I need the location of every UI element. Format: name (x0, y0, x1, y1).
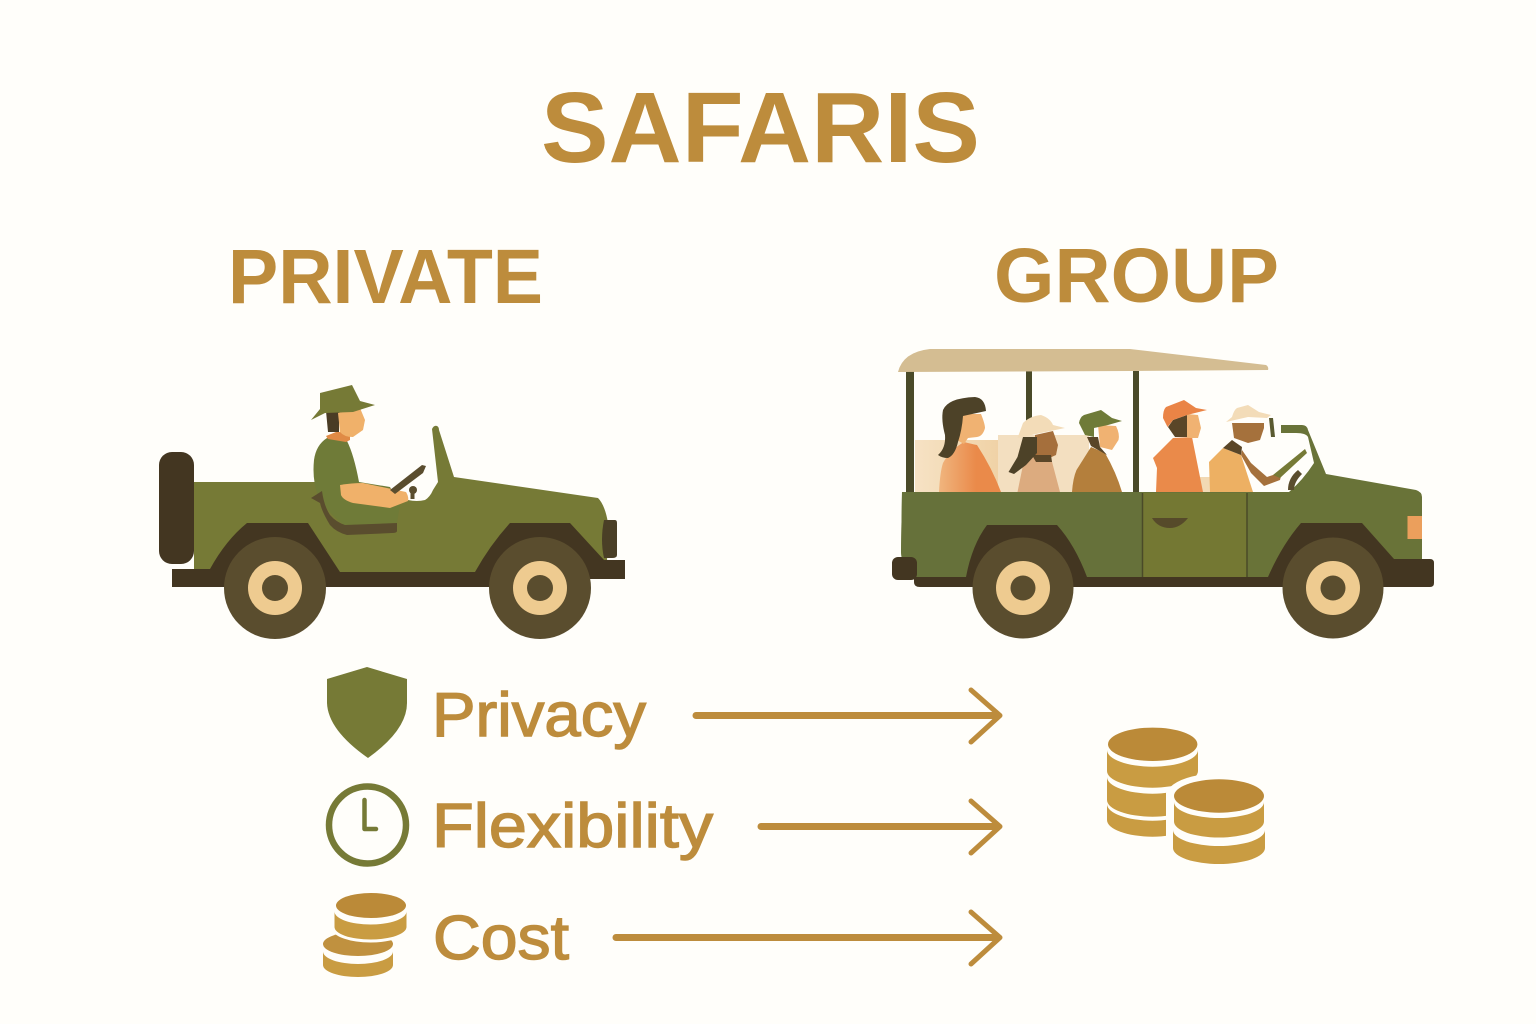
icon: shield (327, 667, 407, 758)
label: cost: Cost (433, 904, 569, 973)
seats (915, 435, 1212, 492)
illustration: group safari vehicle (892, 349, 1434, 638)
icon: large coin stacks (1107, 728, 1280, 870)
driver seat (311, 491, 397, 535)
spare tire (159, 452, 194, 564)
steering wheel (390, 465, 426, 499)
icon: clock (329, 786, 406, 864)
door handle (1152, 518, 1188, 528)
bumper and fenders (172, 523, 625, 587)
rear wheel (972, 538, 1074, 638)
arrow: cost (616, 912, 1000, 964)
passenger: child with green hat (1072, 410, 1122, 492)
steering wheel (1273, 449, 1307, 490)
label: privacy: Privacy (432, 681, 646, 750)
roof posts (906, 371, 1139, 493)
rear body panel (901, 492, 1142, 578)
driver with safari hat (1209, 405, 1282, 492)
front grille (602, 520, 617, 558)
left stack (1107, 728, 1198, 837)
chassis and fenders (914, 523, 1434, 587)
rear bumper block (892, 557, 917, 580)
passenger: woman with white hat (1008, 415, 1065, 492)
jeep body (194, 426, 608, 575)
door seams (1142, 493, 1247, 578)
driver (311, 385, 408, 526)
vehicle body (901, 425, 1422, 578)
right stack (1173, 779, 1265, 864)
arrow: privacy (696, 690, 1000, 742)
headlight (1408, 516, 1422, 539)
lower coin (323, 932, 393, 977)
title: SAFARIS (541, 72, 980, 184)
heading: private: PRIVATE (228, 234, 543, 320)
arrow: flexibility (761, 801, 1000, 853)
icon: small coins (323, 893, 406, 977)
label: flexibility: Flexibility (432, 792, 713, 861)
passenger: man with orange cap (1153, 400, 1207, 492)
front wheel (489, 537, 591, 639)
roof (898, 349, 1268, 372)
door (1143, 493, 1247, 578)
upper coin (334, 893, 406, 939)
mask gap (1166, 775, 1280, 870)
passenger: woman with long hair (938, 397, 1001, 492)
heading: group: GROUP (994, 233, 1279, 319)
rear wheel (224, 537, 326, 639)
illustration: private safari jeep (159, 385, 625, 639)
front wheel (1282, 538, 1384, 638)
